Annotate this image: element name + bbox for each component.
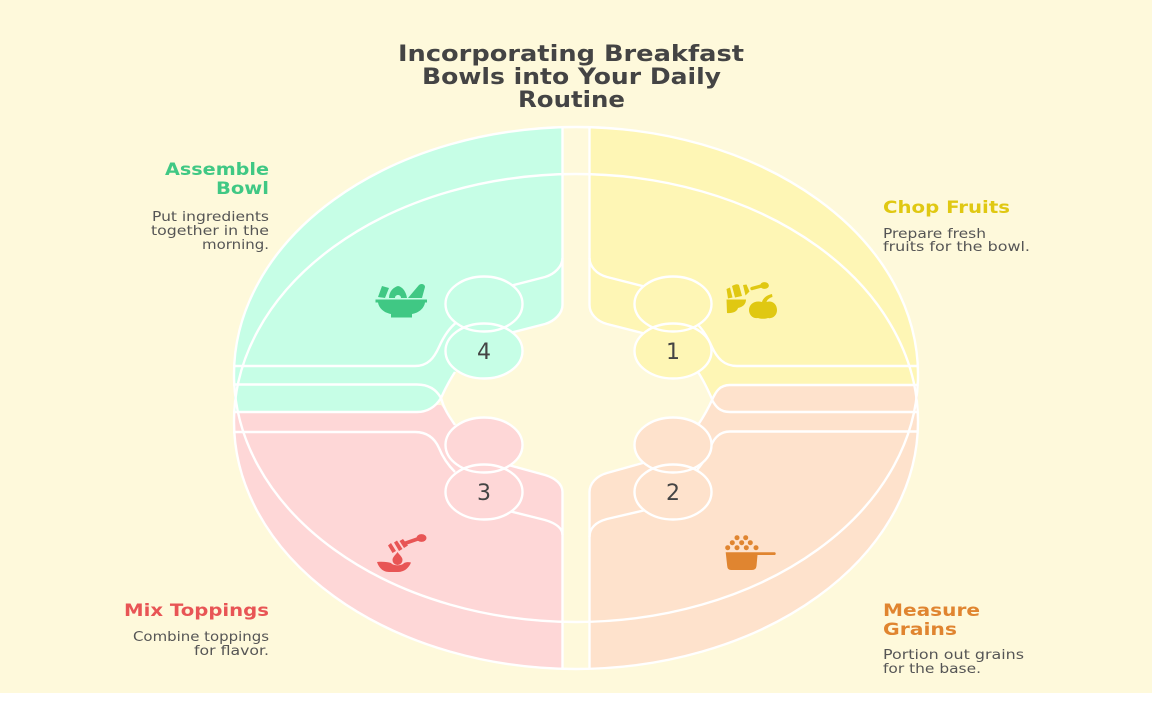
label: chop fruits: Prepare fresh [883,227,986,242]
badge: step 2 circles [634,418,712,520]
panel: step 4 mint quadrant [233,127,562,412]
label: measure grains: Portion out grains [883,648,1024,663]
label: chop fruits [883,198,1030,255]
label: chop fruits: Chop Fruits [883,198,1010,218]
label: mix toppings [124,601,269,659]
label: measure grains: Measure [883,601,980,621]
label: measure grains [883,601,1024,677]
title: Routine [518,88,625,113]
label: mix toppings: for flavor. [194,644,269,659]
badge: step 4 circles [446,276,522,378]
icon: hand, dipper and apple [726,282,777,319]
badge: step 4 circles: 4 [477,340,491,365]
label: assemble bowl: Put ingredients [152,210,269,225]
icon: pot of grains [725,535,776,570]
label: chop fruits: fruits for the bowl. [883,240,1030,255]
ring outlines [234,127,918,669]
badge: step 1 circles: 1 [666,340,680,365]
badge: step 2 circles: 2 [666,481,680,506]
panel: step 3 pink quadrant [233,398,562,669]
panel: step 1 yellow quadrant [590,127,918,402]
label: assemble bowl: Bowl [216,179,269,199]
label: measure grains: for the base. [883,662,981,677]
label: mix toppings: Combine toppings [133,630,269,645]
label: mix toppings: Mix Toppings [124,601,269,621]
label: assemble bowl [151,160,269,253]
title [398,42,745,113]
label: measure grains: Grains [883,620,957,640]
badge: step 1 circles [634,276,712,378]
title: Bowls into Your Daily [422,65,721,90]
badge: step 3 circles [446,418,522,520]
panel: step 2 peach quadrant [590,385,918,669]
title: Incorporating Breakfast [398,42,745,67]
icon: mortar bowl with greens [376,284,427,318]
badge: step 3 circles: 3 [477,481,491,506]
icon: honey dipper over bowl [377,534,426,572]
label: assemble bowl: morning. [202,238,269,253]
label: assemble bowl: together in the [151,224,269,239]
label: assemble bowl: Assemble [165,160,269,180]
